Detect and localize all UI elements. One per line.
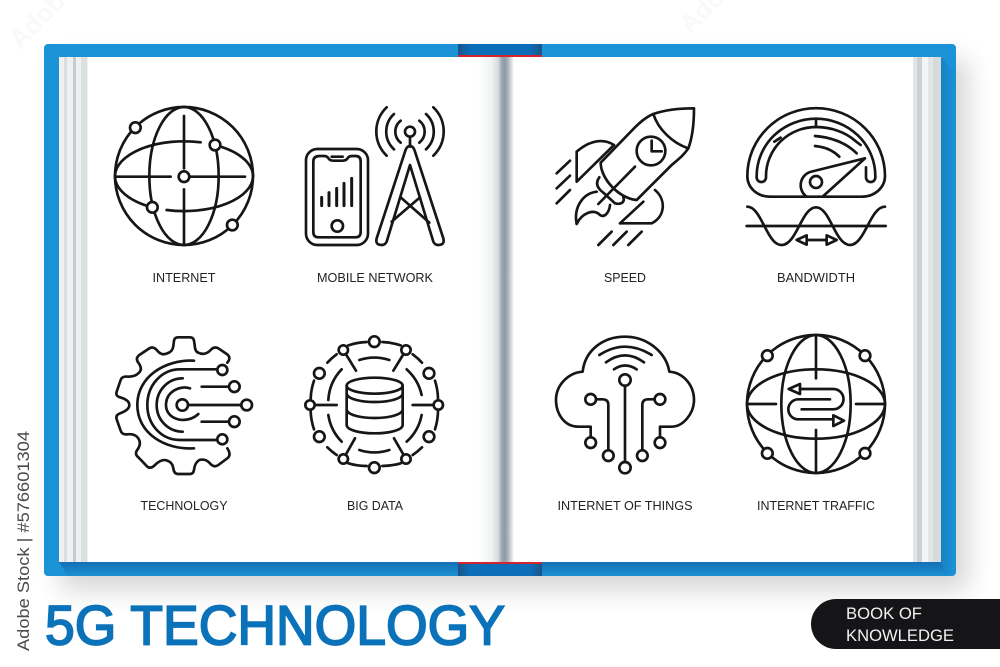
label: big data: BIG DATA	[347, 498, 403, 513]
faint watermark: Adobe Stock	[213, 240, 347, 374]
spine bottom	[458, 564, 542, 576]
label: internet traffic: INTERNET TRAFFIC	[757, 498, 875, 513]
icon: rocket	[557, 108, 694, 245]
badge: book of knowledge	[811, 599, 1000, 649]
faint watermark: Adobe Stock	[363, 420, 497, 554]
blue cover	[44, 44, 956, 576]
faint watermark: Adobe Stock	[703, 400, 837, 534]
icon: mobile phone	[306, 149, 368, 245]
icon: technology gear	[116, 337, 252, 474]
spine fold left	[478, 57, 501, 562]
label: internet of things: INTERNET OF THINGS	[558, 498, 693, 513]
title: 5G TECHNOLOGY	[45, 594, 505, 656]
icon: bandwidth gauge	[747, 108, 886, 245]
label: internet: INTERNET	[152, 270, 216, 285]
cover right inner shade	[941, 57, 956, 576]
spine bottom ribbon	[458, 562, 542, 564]
faint watermark: Adobe Stock	[553, 240, 687, 374]
label: speed: SPEED	[604, 270, 646, 285]
icon: internet traffic	[747, 335, 885, 473]
book	[44, 44, 968, 590]
spine top ribbon	[458, 55, 542, 57]
faint watermark	[3, 0, 837, 554]
white pages	[87, 57, 913, 562]
label: technology: TECHNOLOGY	[140, 498, 228, 513]
cover bottom inner band	[59, 562, 948, 576]
spine fold right	[501, 57, 514, 562]
stock credit: Adobe Stock | #576601304	[14, 431, 33, 651]
left page stacks	[59, 57, 88, 562]
book shadow	[60, 60, 968, 590]
badge: book of knowledge: KNOWLEDGE	[846, 626, 954, 645]
icon: internet globe	[115, 107, 253, 245]
icon: signal tower	[376, 107, 444, 245]
icon: big data	[305, 336, 443, 473]
icon: internet of things	[556, 337, 694, 473]
label: bandwidth: BANDWIDTH	[777, 270, 855, 285]
right page stacks	[913, 57, 941, 562]
spine top	[458, 44, 542, 55]
label: mobile network: MOBILE NETWORK	[317, 270, 433, 285]
badge: book of knowledge: BOOK OF	[846, 604, 922, 623]
